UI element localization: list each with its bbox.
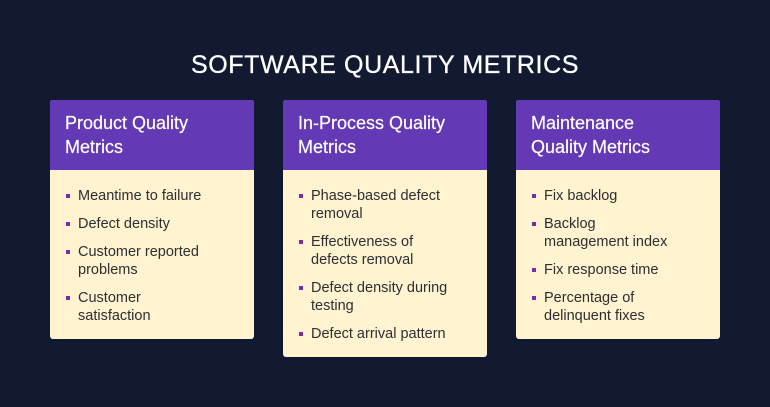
list: in-process: Defect density during	[311, 280, 447, 296]
list: product: satisfaction	[78, 308, 151, 324]
heading: maintenance: Maintenance	[531, 113, 634, 133]
heading: in-process	[283, 100, 487, 170]
panel: product quality	[50, 100, 254, 339]
list: product: Meantime to failure	[78, 188, 201, 204]
heading: product	[50, 100, 254, 170]
list: in-process: Defect arrival pattern	[311, 326, 446, 342]
list: maintenance: Backlog	[544, 216, 596, 232]
title: SOFTWARE QUALITY METRICS	[191, 51, 579, 79]
list: product: Customer reported	[78, 244, 199, 260]
heading: in-process: Metrics	[298, 137, 356, 157]
list: maintenance: Fix response time	[544, 262, 658, 278]
list: in-process: Effectiveness of	[311, 234, 413, 250]
list: in-process: Phase-based defect	[311, 188, 440, 204]
list: maintenance: Fix backlog	[544, 188, 617, 204]
list: product: Customer	[78, 290, 141, 306]
heading: in-process: In-Process Quality	[298, 113, 445, 133]
list: in-process	[299, 188, 447, 342]
list: maintenance: Percentage of	[544, 290, 634, 306]
panel: maintenance	[516, 100, 720, 339]
list: maintenance: management index	[544, 234, 667, 250]
list: product: problems	[78, 262, 138, 278]
heading: maintenance	[516, 100, 720, 170]
list: maintenance: delinquent fixes	[544, 308, 645, 324]
heading: product: Product Quality	[65, 113, 188, 133]
heading: product: Metrics	[65, 137, 123, 157]
list: product: Defect density	[78, 216, 170, 232]
list: maintenance	[532, 188, 668, 324]
heading: maintenance: Quality Metrics	[531, 137, 650, 157]
list: product	[66, 188, 201, 324]
list: in-process: testing	[311, 298, 354, 314]
list: in-process: defects removal	[311, 252, 413, 268]
list: in-process: removal	[311, 206, 363, 222]
panel: in-process	[283, 100, 487, 357]
